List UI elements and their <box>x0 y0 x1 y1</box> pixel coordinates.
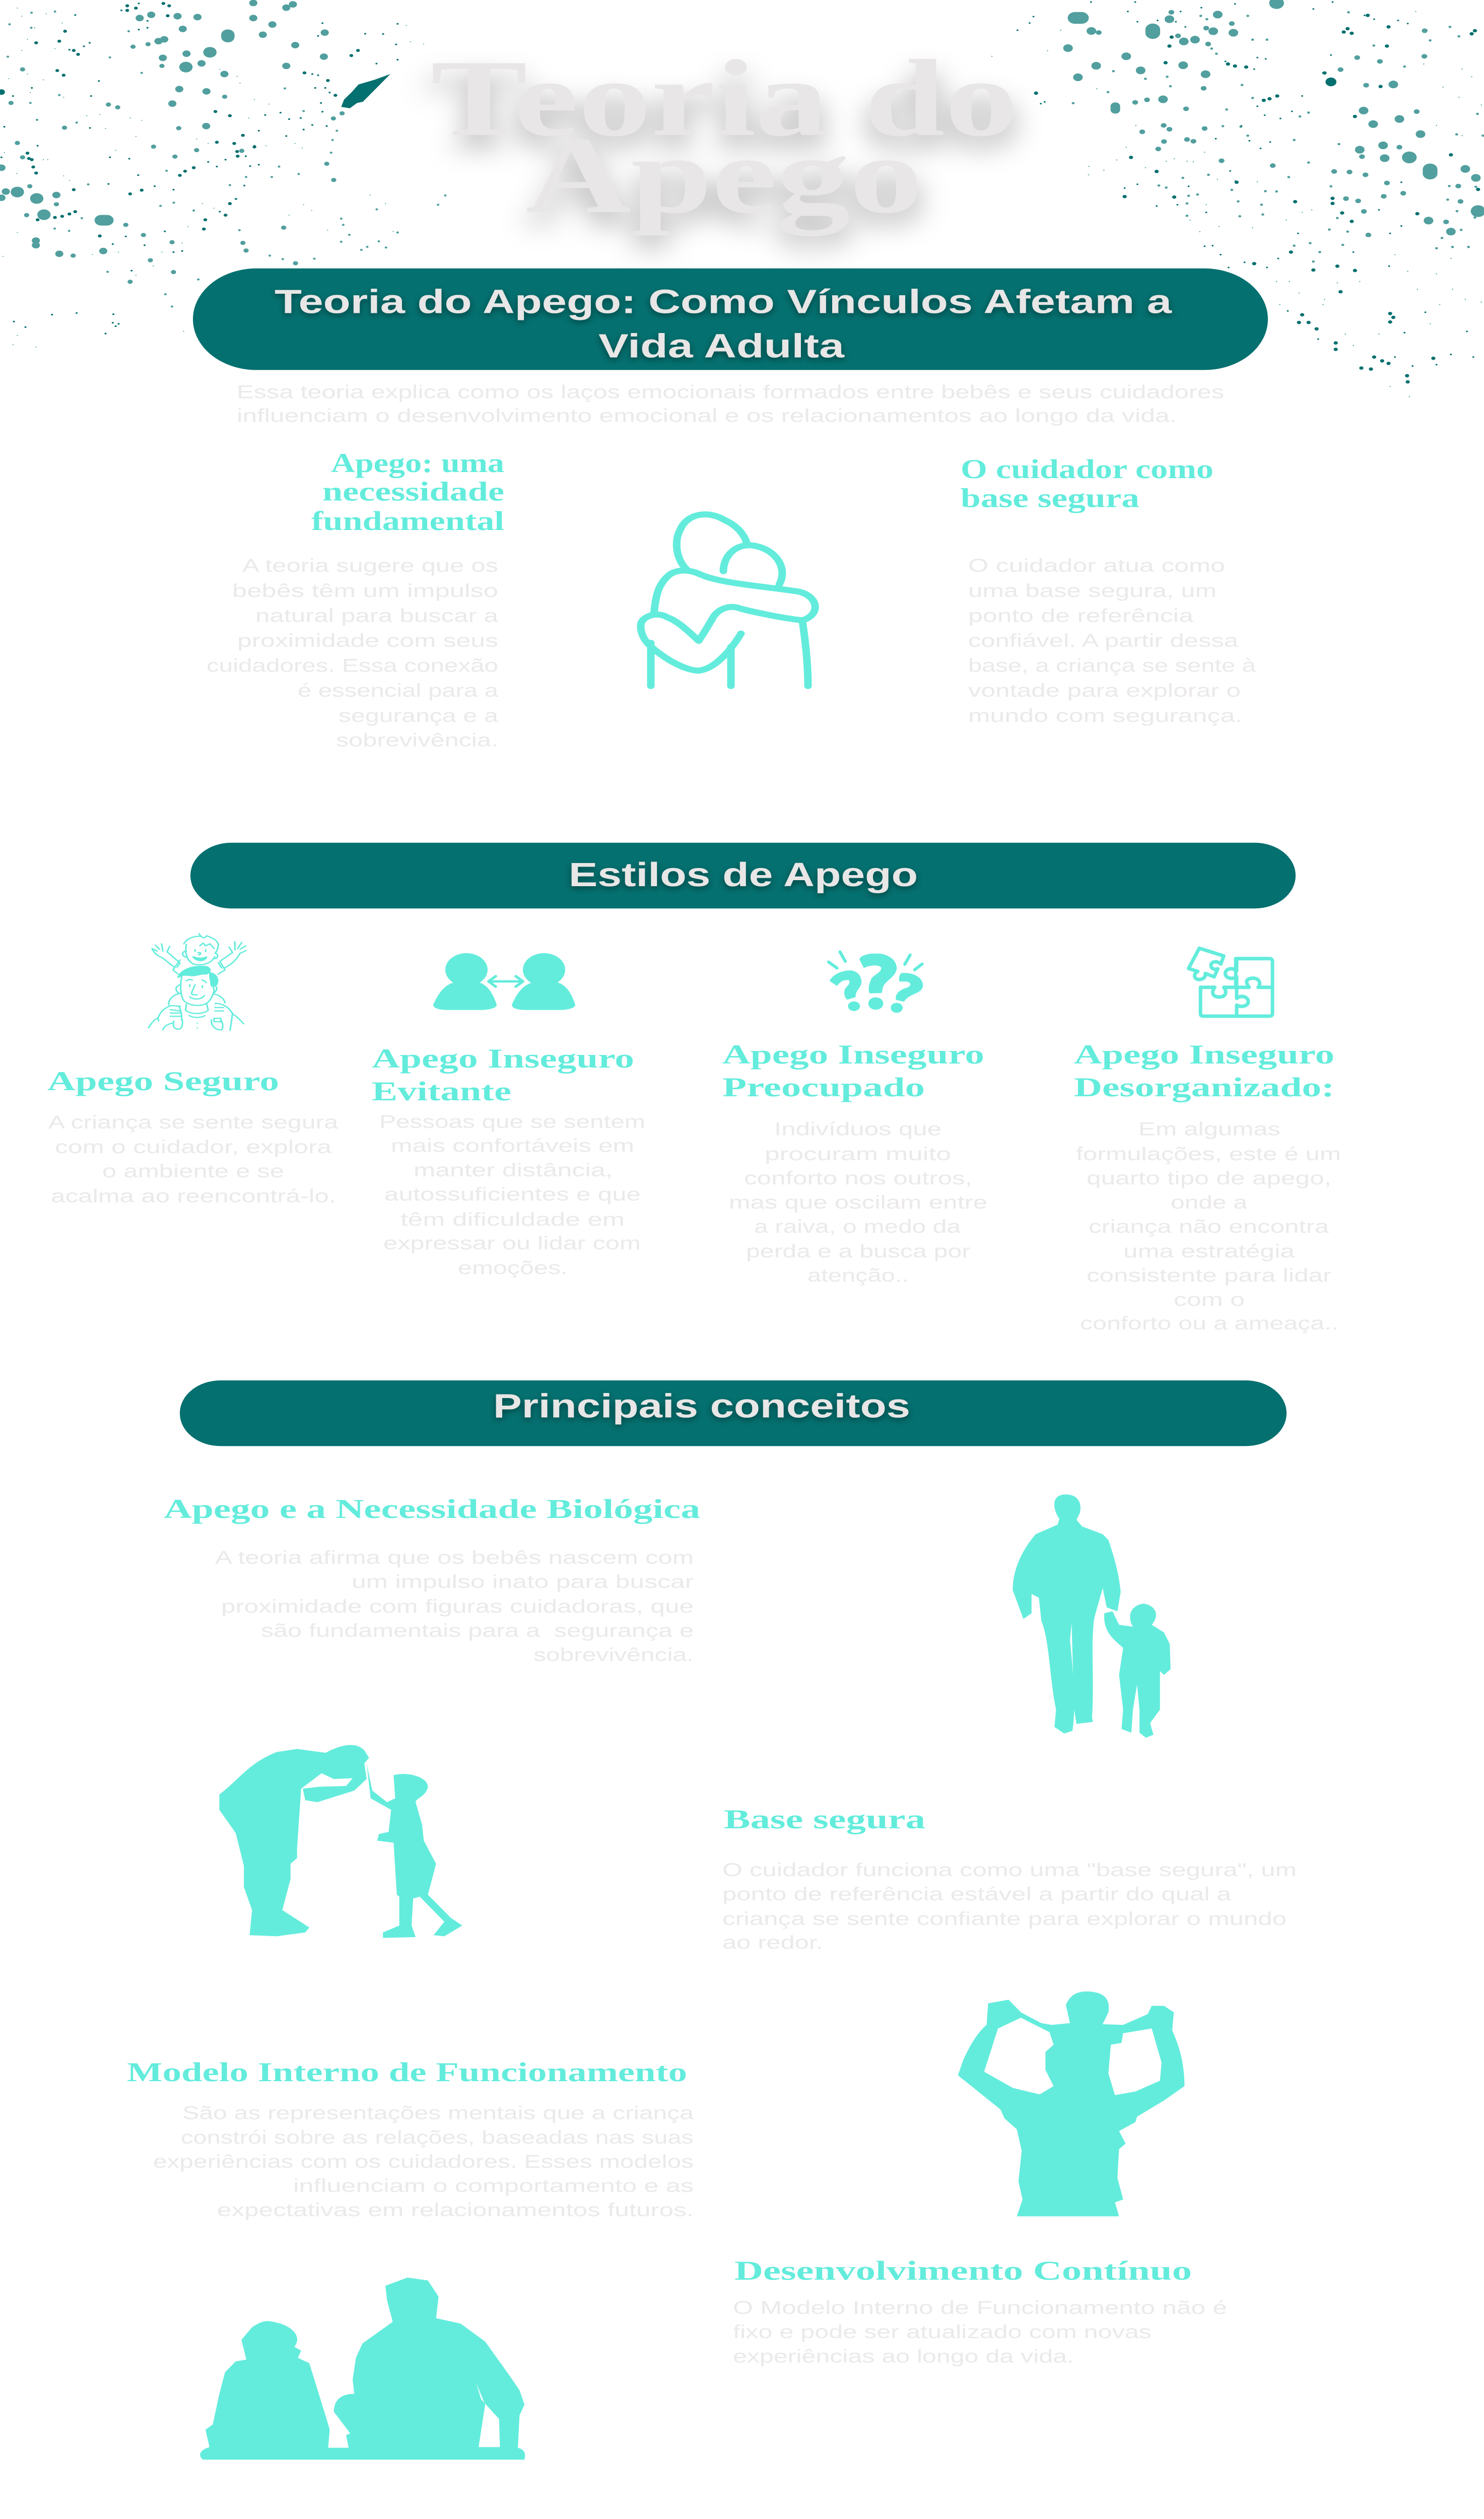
card: Apego Inseguro Evitante: mais confortáveis em <box>391 1135 634 1156</box>
text block: left paragraph: natural para buscar a <box>255 605 499 626</box>
concept: Modelo Interno de Funcionamento: São as representações mentais que a criança <box>182 2102 694 2123</box>
concept: Desenvolvimento Contínuo <box>733 2256 1227 2367</box>
text block: right paragraph <box>968 555 1256 726</box>
card: Apego Inseguro Evitante: têm dificuldade em <box>400 1209 625 1230</box>
card: Apego Seguro: Apego Seguro <box>47 1066 279 1096</box>
card: Apego Seguro: acalma ao reencontrá-lo. <box>51 1185 336 1206</box>
silhouette: child on adult shoulders <box>958 1992 1184 2216</box>
concept: Desenvolvimento Contínuo: Desenvolvimento Contínuo <box>734 2256 1192 2286</box>
card: Apego Seguro: com o cuidador, explora <box>55 1136 332 1157</box>
banner: main heading: Vida Adulta <box>598 327 845 365</box>
icon: question marks <box>829 952 923 1013</box>
text block: right paragraph: vontade para explorar o <box>968 680 1241 701</box>
card: Apego Inseguro Desorganizado: Desorganizado: <box>1074 1072 1334 1102</box>
concept: Base segura: ponto de referência estável a partir do qual a <box>722 1883 1232 1904</box>
card: Apego Inseguro Preocupado: atenção.. <box>807 1265 909 1286</box>
concept: Apego e a Necessidade Biológica: proximidade com figuras cuidadoras, que <box>221 1596 694 1617</box>
concept: Desenvolvimento Contínuo: O Modelo Interno de Funcionamento não é <box>733 2297 1227 2318</box>
concept: Apego e a Necessidade Biológica: um impulso inato para buscar <box>352 1571 694 1592</box>
icon: two people with arrow <box>433 953 575 1010</box>
card: Apego Inseguro Desorganizado: quarto tipo de apego, <box>1087 1168 1331 1188</box>
title: Apego <box>525 115 923 236</box>
banner: main heading <box>193 269 1268 370</box>
concept: Base segura: Base segura <box>724 1804 925 1834</box>
card: Apego Inseguro Evitante: emoções. <box>458 1257 568 1278</box>
concept: Modelo Interno de Funcionamento: Modelo Interno de Funcionamento <box>127 2057 687 2088</box>
concept: Base segura <box>722 1804 1297 1953</box>
text block: left paragraph: proximidade com seus <box>237 630 498 651</box>
card: Apego Inseguro Desorganizado: uma estratégia <box>1123 1240 1295 1262</box>
title: Teoria do <box>431 38 1018 159</box>
card: Apego Inseguro Evitante: Pessoas que se sentem <box>379 1111 645 1132</box>
card: Apego Inseguro Desorganizado: conforto ou a ameaça.. <box>1080 1313 1338 1334</box>
banner: Principais conceitos <box>180 1380 1287 1446</box>
text block: right paragraph: base, a criança se sente à <box>968 655 1256 676</box>
banner: main heading: Teoria do Apego: Como Vínculos Afetam a <box>275 283 1172 321</box>
card: Apego Inseguro Preocupado: Preocupado <box>722 1072 925 1102</box>
intro text: influenciam o desenvolvimento emocional e os relacionamentos ao longo da vida. <box>237 405 1177 426</box>
text block: left paragraph: segurança e a <box>339 705 499 726</box>
card: Apego Inseguro Evitante <box>372 1043 645 1278</box>
card: Apego Inseguro Evitante: Evitante <box>372 1076 511 1106</box>
heading: Apego: uma necessidade fundamental <box>311 448 504 536</box>
card: Apego Seguro <box>47 1066 339 1206</box>
card: Apego Inseguro Preocupado: Indivíduos que <box>774 1118 941 1140</box>
card: Apego Inseguro Desorganizado: criança não encontra <box>1089 1216 1329 1237</box>
text block: right paragraph: ponto de referência <box>968 605 1194 626</box>
card: Apego Inseguro Preocupado: perda e a busca por <box>746 1240 970 1262</box>
concept: Desenvolvimento Contínuo: fixo e pode ser atualizado com novas <box>733 2321 1152 2342</box>
card: Apego Inseguro Evitante: manter distância, <box>414 1160 613 1180</box>
card: Apego Inseguro Desorganizado: Apego Inseguro <box>1074 1039 1334 1070</box>
heading: Apego: uma necessidade fundamental: necessidade <box>322 477 504 507</box>
splatter: top right <box>992 2 1483 396</box>
heading: O cuidador como base segura: O cuidador como <box>961 454 1213 484</box>
card: Apego Inseguro Desorganizado: com o <box>1174 1289 1245 1310</box>
card: Apego Inseguro Desorganizado <box>1074 1039 1341 1334</box>
concept: Base segura: criança se sente confiante para explorar o mundo <box>722 1908 1287 1929</box>
intro text: Essa teoria explica como os laços emocionais formados entre bebês e seus cuidadores <box>237 381 1224 402</box>
card: Apego Inseguro Evitante: Apego Inseguro <box>372 1043 634 1074</box>
text block: right paragraph: uma base segura, um <box>968 580 1217 601</box>
text block: right paragraph: O cuidador atua como <box>968 555 1225 576</box>
card: Apego Inseguro Evitante: autossuficientes e que <box>384 1184 641 1205</box>
banner: Principais conceitos: Principais conceitos <box>493 1387 910 1425</box>
icon: child on shoulders line art <box>149 934 246 1030</box>
concept: Modelo Interno de Funcionamento: influenciam o comportamento e as <box>293 2175 694 2196</box>
concept: Modelo Interno de Funcionamento: constrói sobre as relações, baseadas nas suas <box>181 2127 694 2148</box>
silhouette: adult and child seated <box>200 2278 525 2460</box>
concept: Modelo Interno de Funcionamento: experiências com os cuidadores. Esses modelos <box>153 2151 694 2172</box>
concept: Apego e a Necessidade Biológica: Apego e a Necessidade Biológica <box>164 1494 700 1524</box>
card: Apego Inseguro Desorganizado: formulações, este é um <box>1076 1144 1341 1164</box>
text block: left paragraph: cuidadores. Essa conexão <box>207 655 498 676</box>
intro text <box>237 381 1224 426</box>
concept: Base segura: O cuidador funciona como uma "base segura", um <box>722 1859 1297 1880</box>
card: Apego Inseguro Preocupado: mas que oscilam entre <box>729 1192 987 1213</box>
card: Apego Inseguro Desorganizado: consistente para lidar <box>1087 1265 1331 1286</box>
concept: Modelo Interno de Funcionamento <box>127 2057 694 2220</box>
text block: left paragraph <box>207 555 499 751</box>
card: Apego Inseguro Evitante: expressar ou lidar com <box>383 1232 641 1253</box>
heading: O cuidador como base segura: base segura <box>961 483 1139 513</box>
heading: Apego: uma necessidade fundamental: Apego: uma <box>331 448 504 478</box>
text block: left paragraph: sobrevivência. <box>336 730 498 751</box>
text block: right paragraph: confiável. A partir dessa <box>968 630 1239 651</box>
heading: Apego: uma necessidade fundamental: fundamental <box>311 506 504 536</box>
card: Apego Inseguro Preocupado: a raiva, o medo da <box>754 1216 961 1237</box>
concept: Modelo Interno de Funcionamento: expectativas em relacionamentos futuros. <box>217 2200 694 2220</box>
silhouette: adult high-five with child <box>219 1745 462 1938</box>
concept: Apego e a Necessidade Biológica: sobrevivência. <box>533 1644 694 1665</box>
card: Apego Inseguro Desorganizado: Em algumas <box>1138 1118 1280 1140</box>
concept: Apego e a Necessidade Biológica <box>164 1494 700 1665</box>
card: Apego Inseguro Preocupado: procuram muito <box>765 1144 951 1164</box>
splatter: top left <box>2 3 445 347</box>
card: Apego Inseguro Desorganizado: onde a <box>1171 1192 1248 1213</box>
text block: left paragraph: é essencial para a <box>298 680 499 701</box>
card: Apego Inseguro Preocupado: Apego Inseguro <box>722 1039 984 1070</box>
concept: Desenvolvimento Contínuo: experiências ao longo da vida. <box>733 2346 1074 2367</box>
heading: O cuidador como base segura <box>961 454 1213 513</box>
card: Apego Inseguro Preocupado <box>722 1039 987 1286</box>
banner: Estilos de Apego <box>190 843 1296 908</box>
text block: left paragraph: bebês têm um impulso <box>232 580 498 601</box>
card: Apego Seguro: A criança se sente segura <box>48 1111 339 1133</box>
banner: Estilos de Apego: Estilos de Apego <box>569 856 918 894</box>
icon: puzzle <box>1188 948 1272 1016</box>
card: Apego Inseguro Preocupado: conforto nos outros, <box>744 1168 972 1188</box>
concept: Apego e a Necessidade Biológica: A teoria afirma que os bebês nascem com <box>215 1547 694 1568</box>
text block: right paragraph: mundo com segurança. <box>968 705 1242 726</box>
concept: Apego e a Necessidade Biológica: são fundamentais para a segurança e <box>261 1620 694 1641</box>
silhouette: adult walking with child <box>1013 1494 1171 1738</box>
text block: left paragraph: A teoria sugere que os <box>242 555 498 576</box>
card: Apego Seguro: o ambiente e se <box>102 1160 284 1181</box>
concept: Base segura: ao redor. <box>722 1932 823 1953</box>
icon: embrace <box>641 514 815 686</box>
title <box>431 38 1018 236</box>
